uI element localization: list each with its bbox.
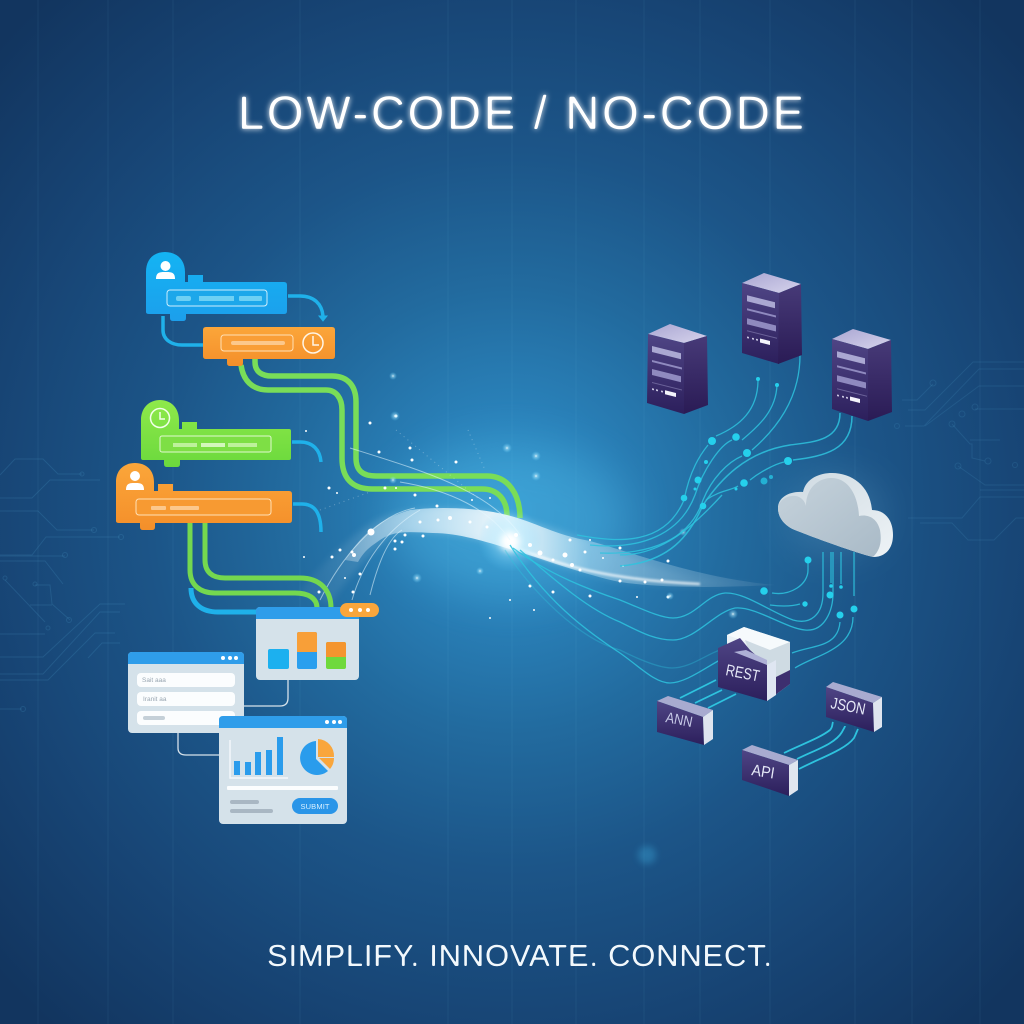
- icon: clock: [303, 333, 323, 353]
- data nodes: upper: [681, 377, 792, 509]
- block: blue user: [146, 252, 287, 321]
- block: ANN: [657, 696, 713, 745]
- block: API: [742, 745, 798, 796]
- tiles: [268, 632, 346, 669]
- sparkles: [389, 372, 738, 864]
- cloud: [778, 473, 893, 557]
- icon: user: [126, 471, 144, 490]
- glow behind stream: [390, 445, 630, 595]
- stream of light: [300, 414, 780, 619]
- connector: green curl: [292, 442, 321, 462]
- API links: [680, 680, 858, 769]
- form fields: Sait aaa: [142, 677, 166, 684]
- server right: [832, 329, 892, 421]
- pie chart: [300, 739, 334, 775]
- window: dashboard: [219, 716, 347, 824]
- pipes: lower: [190, 523, 331, 612]
- form fields: [137, 673, 235, 725]
- input field: [136, 499, 271, 515]
- block: orange user: [116, 463, 292, 530]
- block: ANN: ANN: [664, 709, 694, 731]
- connector lines between windows: [178, 680, 288, 755]
- server middle: [742, 273, 802, 364]
- cloud glow: [790, 480, 880, 550]
- input field: [160, 436, 271, 452]
- block: REST: REST: [724, 662, 761, 685]
- divider and text lines: [227, 786, 338, 813]
- data lines: servers to stream: [577, 355, 852, 566]
- block: green clock: [141, 400, 291, 467]
- block: REST: [718, 627, 790, 701]
- window: form: [128, 652, 244, 733]
- submit button: SUBMIT: [300, 802, 330, 811]
- window: bar tiles: [256, 603, 379, 680]
- bar chart: [230, 737, 288, 778]
- block: API: API: [750, 762, 776, 783]
- input field: [221, 335, 293, 351]
- connector: orange curl: [293, 504, 321, 532]
- data nodes: lower: [760, 556, 858, 618]
- block: JSON: [826, 682, 882, 732]
- block: JSON: JSON: [829, 695, 867, 719]
- form fields: Iranit aa: [143, 696, 167, 703]
- icon: clock: [150, 408, 170, 428]
- pipes: orange to stream: [241, 359, 520, 518]
- icon: user: [156, 261, 175, 279]
- circuit traces left: [0, 459, 125, 712]
- title: LOW-CODE / NO-CODE: [238, 86, 804, 139]
- data lines: fan and cloud: [505, 545, 854, 683]
- server left: [647, 324, 708, 414]
- circuit traces right: [894, 362, 1024, 540]
- tagline: SIMPLIFY. INNOVATE. CONNECT.: [267, 938, 772, 973]
- block: orange clock: [203, 327, 335, 366]
- connector: blue arrow and link: [163, 296, 327, 345]
- input field: [167, 290, 267, 306]
